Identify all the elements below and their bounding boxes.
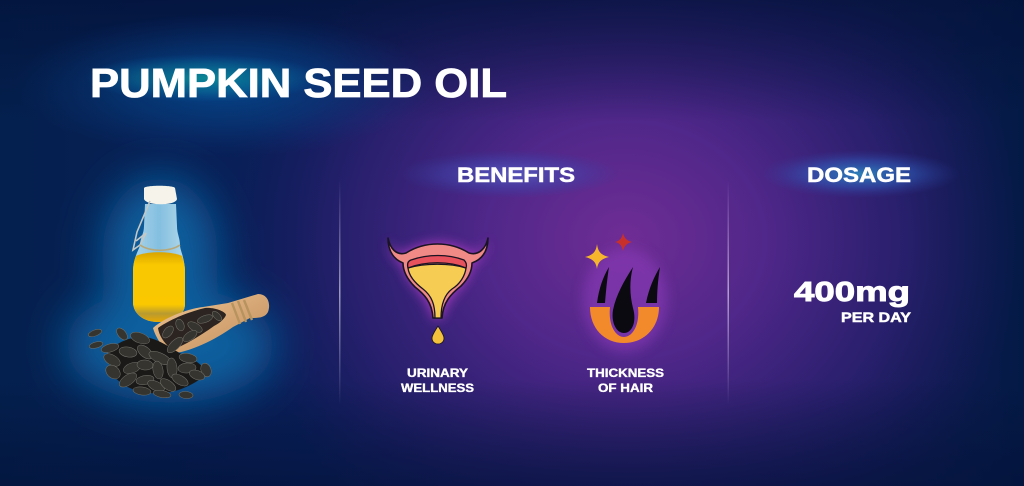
bladder glow [388,239,488,318]
wooden scoop [153,294,269,354]
oil bottle [133,186,185,322]
label: urinary wellness: URINARY [407,368,468,380]
product photo: oil bottle and seeds [65,177,275,403]
icon: bladder [388,238,488,344]
follicle glow [583,248,667,352]
label: thickness of hair: OF HAIR [598,383,654,395]
label: urinary wellness: WELLNESS [401,383,474,395]
title glow [15,13,435,157]
divider right [728,180,729,405]
benefits heading glow [400,150,620,198]
dosage heading glow [760,150,960,198]
individual seeds [87,310,223,399]
title: PUMPKIN SEED OIL [90,60,507,106]
dosage amount: 400mg [794,276,910,307]
benefits heading: BENEFITS [457,164,575,187]
dosage heading: DOSAGE [807,164,911,187]
icon: hair follicle [583,233,667,352]
dosage amount: PER DAY [841,309,912,325]
label: thickness of hair [587,368,664,395]
label: thickness of hair: THICKNESS [587,368,664,380]
label: urinary wellness [401,368,474,395]
dosage amount [794,276,912,325]
seed pile shadow [108,337,205,393]
photo glow [65,177,275,403]
seeds [87,310,223,399]
divider left [339,180,340,405]
